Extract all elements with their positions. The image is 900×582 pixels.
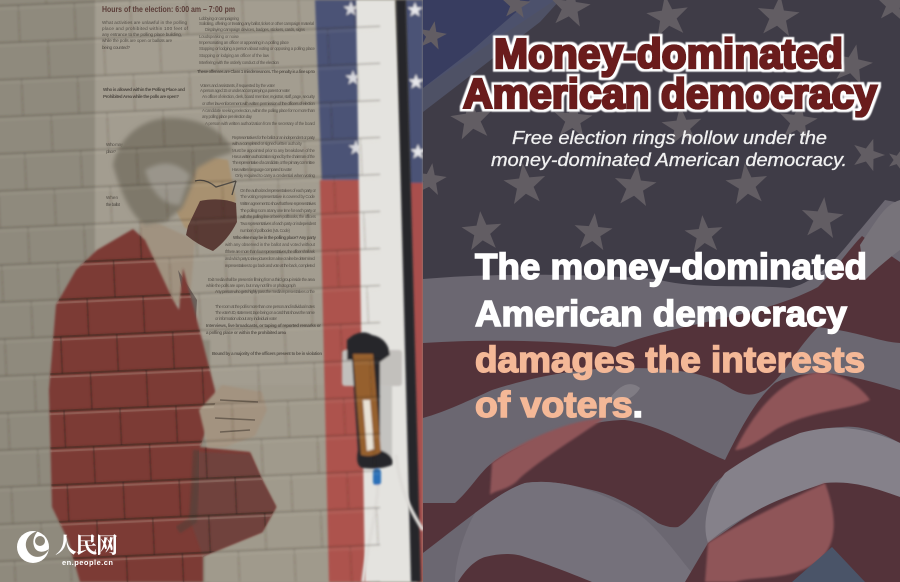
poster left column text: When [106,195,118,200]
poster right column text: A candidate seeking reelection, within the polling place for no more than [202,108,316,113]
poster right column text: On the authorized representatives of each party or [240,188,317,193]
light highlights [860,200,900,280]
poster right column text: The voting representative is covered by Code [240,194,316,199]
white door frame [356,0,420,582]
poster right column text: and which party to take pictures from a line or a line be determined [225,256,316,261]
poster right column text: Representatives for the ballot or an independent or party [232,135,316,140]
title line 2: American democracy [463,70,878,117]
elderly voter [49,118,276,582]
poster heading: Hours of the election: 6:00 am – 7:00 pm [102,4,235,14]
election notice poster [95,0,330,582]
poster right column text: Has written language compared to voter [232,167,293,172]
handset [353,354,381,456]
background stars [412,0,900,253]
title line 1: Money-dominated [494,30,843,77]
hanging US flag [315,0,370,582]
logo emblem [17,531,49,563]
dark star field [423,0,900,582]
poster left column text: Who may [106,142,124,147]
bag strap [178,450,197,530]
poster left column text: being counted? [102,45,130,50]
phone body [347,332,392,469]
poster left column text: any entrance to the polling place building, [102,32,182,37]
brick wall [0,0,423,582]
poster right column text: Who else may be in the polling place? Any party [233,235,317,240]
far flag stars [407,2,426,158]
wall phone [342,332,423,582]
poster right column text: with any observed in the ballot and voted without [225,242,316,247]
middle red stripe [423,373,900,553]
flag stripes [423,200,900,582]
light streak [423,0,560,112]
poster left column text [102,20,189,207]
subtitle line 1: Free election rings hollow under the [512,128,827,148]
poster right column text: These offenses are Class 1 misdemeanors. The penalty is a fine up to [197,69,315,74]
poster right column text: with a completed or signed written authority [232,141,303,146]
poster right column text: Bound by a majority of the officers present to be in violation [212,351,322,356]
statement line 3 highlight: damages the interests [475,339,865,380]
poster right column text: number of pollbooks (Va. Code) [240,228,291,233]
logo wordmark: 人民网 [55,533,118,558]
flag stars [342,0,360,156]
panel: flag background [412,0,900,582]
poster right column text: or other law-enforcement with written permission of the officers of election [202,101,316,106]
poster right column text: while the polls are open, but may not film or photograph [206,283,297,288]
hair [113,118,233,225]
metal bracket [342,350,402,386]
poster right column text: If there are more than four representatives, the officer shall ask [225,249,316,254]
poster right column text: any polling place per election day [202,114,253,119]
poster left column text: place and prohibited within 100 feet of [102,26,189,31]
poster right column text: Loudspeaking or noise [199,34,240,39]
poster right column text: Must be appointed prior to any breakdown of the [232,148,316,153]
poster right column text: Exit media shall be present in filming from a third group inside the area [208,277,316,282]
poster left column text: What activities are unlawful in the polling [102,20,187,25]
grey stripes base [423,200,900,582]
cables [363,455,423,582]
panel: voter photo [0,0,426,582]
lower red stripes [458,554,592,582]
poster right column text: or information about any individual voter [215,316,278,321]
poster right column text: Interfering with the orderly conduct of the election [199,60,280,65]
blue plug [373,469,381,485]
subtitle line 2: money-dominated American democracy. [491,150,847,170]
poster right column text: An officer of election, clerk, board member, registrar, staff, page, security [202,94,316,99]
poster right column text: a polling place or within the prohibited area [206,330,287,335]
face [176,158,236,230]
poster left column text: place? [106,149,116,154]
people.cn logo [17,531,118,567]
hands [199,385,267,447]
poster right column text: Two representatives of each party or independent [240,221,317,226]
poster right column text: Lobbying or campaigning [199,16,240,21]
far flag strip [405,0,423,582]
poster left column text: Who is allowed within the Polling Place and [103,87,185,92]
poster right column text: Has a written authorization signed by the chairman of the [232,154,316,159]
poster right column text: The room at the poll is more than one person and individual notes [215,304,316,309]
poster right column text: Soliciting, offering or treating any ballot, ticket or other campaign material [199,21,314,26]
red jacket and handbag [49,229,276,582]
title [463,30,878,117]
poster right column text: A person with written authorization from the secretary of the board [205,121,316,126]
poster right column text: representatives to go back and vote at the back, completed [225,263,316,268]
statement line 4 highlight: of voters. [475,384,643,425]
poster right column text: Any person who gets highly pass the media representatives or the [215,289,316,294]
poster right column text: Written agreement to show that these representatives [240,201,317,206]
glasses [195,180,236,195]
logo url: en.people.cn [62,558,113,567]
sunlit red patches [490,372,870,582]
poster left column text: the ballot [106,202,121,207]
poster right column text: with the polling line or been pollbooks, the officers [240,214,317,219]
main statement [475,246,867,425]
poster right column text: Voters and assistants, if requested by the voter [200,83,276,88]
light grey lower stripes [705,428,900,543]
poster right column text: Interviews, live broadcasts, or taping of reported remarks or [206,323,321,328]
poster right column text: Impersonating an officer or appearing in a polling place [199,40,290,45]
statement line 1: The money-dominated [475,246,867,287]
poster right column text: Only required to carry a credential when voting [235,173,316,178]
label [363,400,374,451]
subtitle [491,128,847,170]
brick overlay on jacket [40,225,280,582]
poster right column text: Displaying campaign devices, badges, stickers, cards, signs [205,27,306,32]
poster left column text: while the polls are open or ballots are [102,38,172,43]
neck [140,224,194,304]
poster left column text: Prohibited Area while the polls are open? [103,94,179,99]
inner garment [178,270,197,319]
handbag shade [190,452,276,556]
poster right column text: The polling room at any one time for each party or [240,208,317,213]
brick overlay on wall [0,0,380,582]
poster right column text [197,16,322,356]
statement line 2: American democracy [475,293,847,334]
poster right column text: Stopping or lodging a person about voting or opposing a polling place [199,46,316,51]
face mask [186,199,237,251]
poster right column text: The voter's ID, statement, tape being on a card that shows the name [215,310,316,315]
poster right column text: The representative of a candidate, or the primary committee [232,160,316,165]
blue lower corner [792,547,865,582]
poster right column text: A person aged 15 or under accompanying a parent or voter [200,88,291,93]
finger shadows [215,400,258,432]
black frame strip [396,0,421,582]
blue canton corner [423,0,530,88]
upper red stripe [423,236,900,418]
poster right column text: Stopping or lodging an officer of the law [199,53,270,58]
